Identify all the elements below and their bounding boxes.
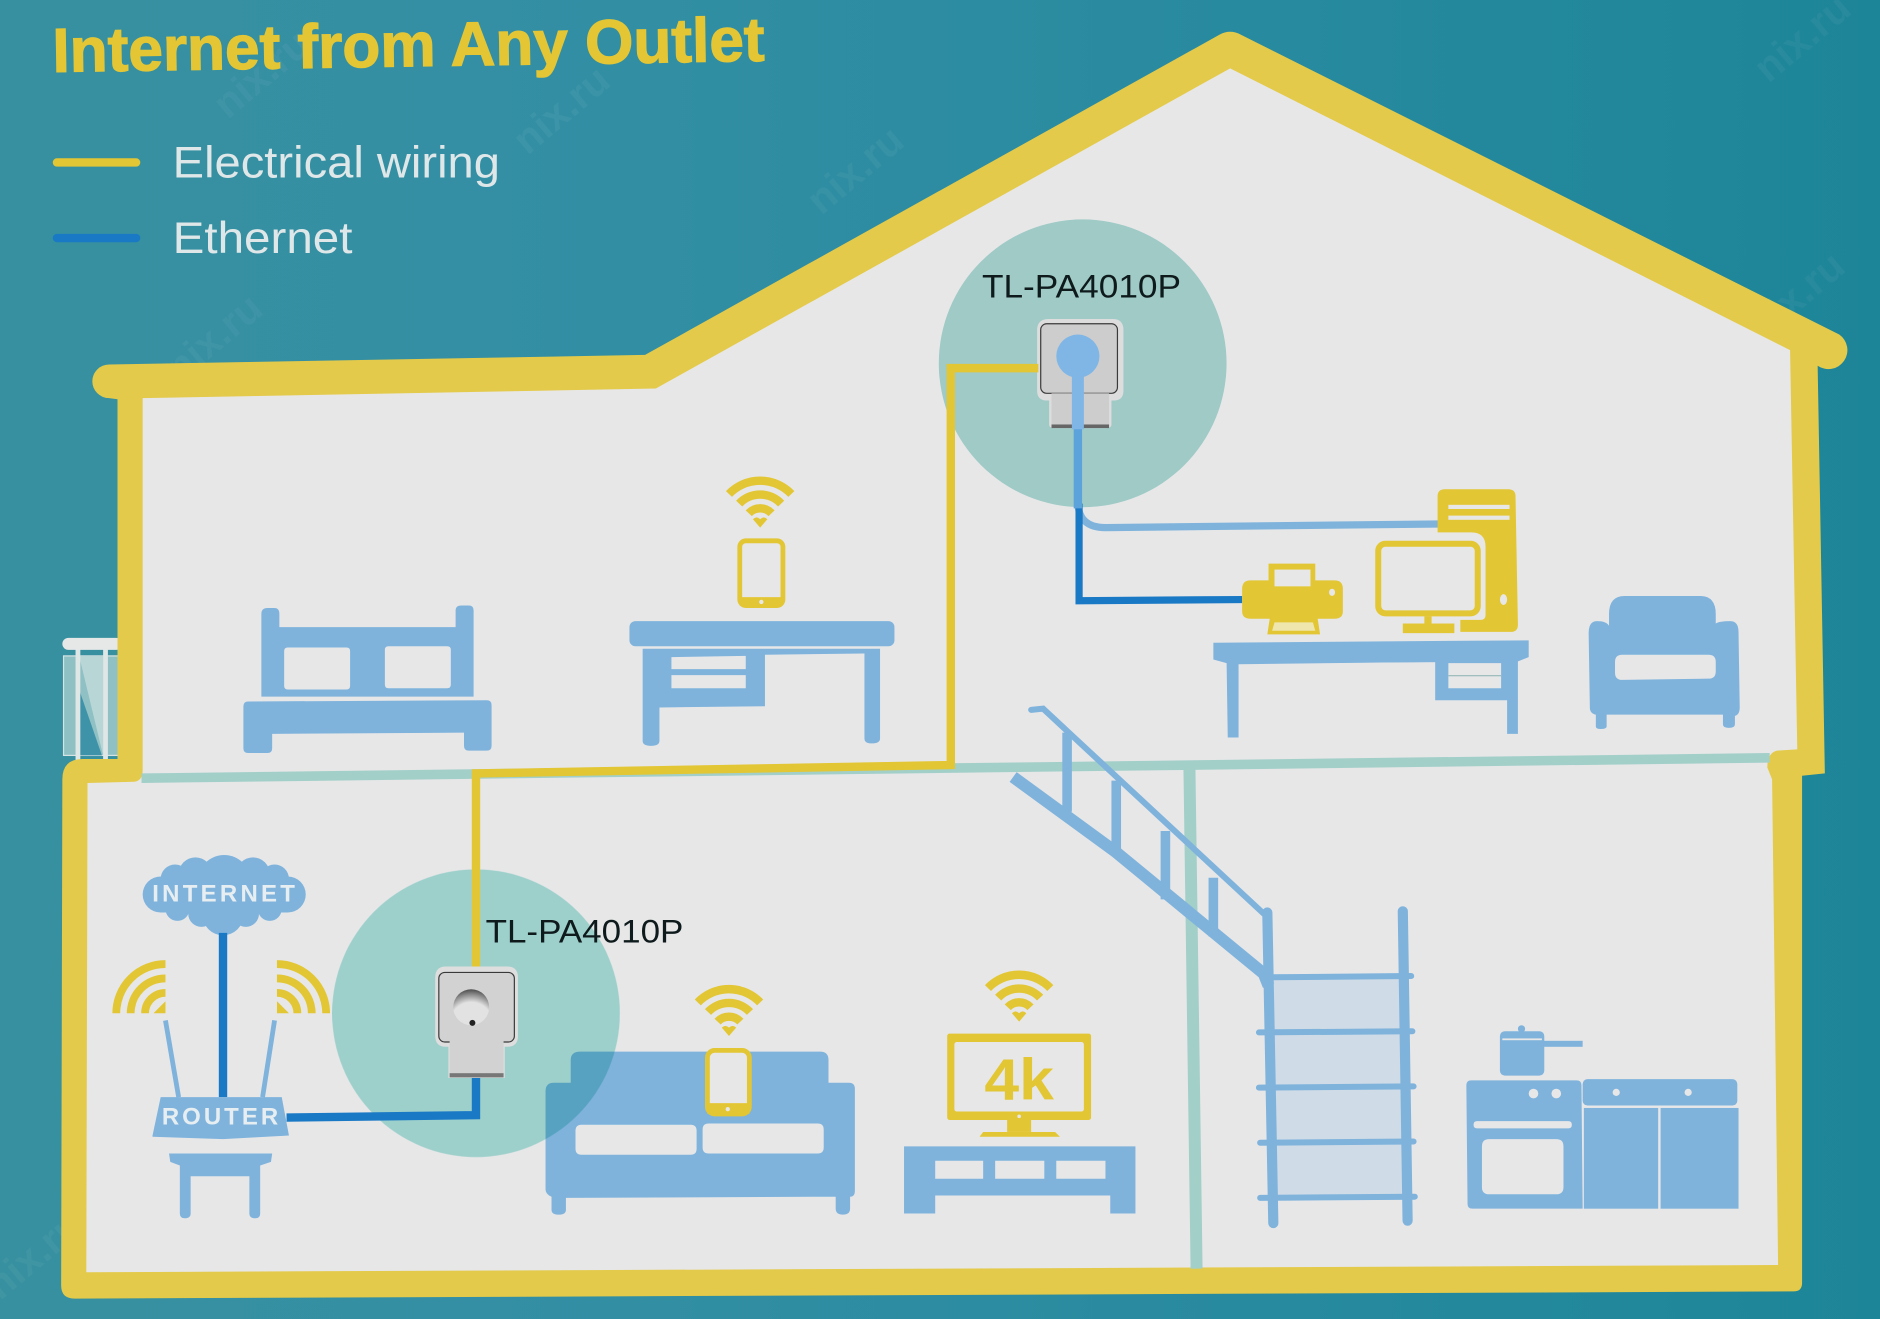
icon: tablet	[740, 541, 783, 606]
icon: phone	[707, 1050, 749, 1114]
wifi right	[277, 964, 326, 1013]
watermarks: nix.ru	[156, 284, 271, 391]
panel: lower adapter circle	[332, 869, 620, 1157]
legend: electrical wiring: Electrical wiring	[173, 138, 500, 187]
icon: computer tower	[1438, 489, 1518, 632]
wifi icon: sofa	[698, 989, 760, 1036]
furniture: sofa	[546, 1052, 855, 1215]
balcony railing	[62, 638, 122, 761]
watermarks: nix.ru	[1739, 242, 1853, 349]
wifi icon: tv	[988, 975, 1050, 1022]
furniture: stairs	[1013, 709, 1415, 1223]
furniture: tv stand	[904, 1146, 1135, 1213]
wifi icon: bedroom	[729, 481, 791, 528]
icon: monitor	[1378, 544, 1478, 633]
furniture: armchair	[1589, 596, 1740, 729]
watermarks: nix.ru	[504, 56, 618, 163]
floor line	[141, 758, 1770, 778]
furniture: bed	[261, 606, 474, 697]
panel: upper adapter circle	[939, 219, 1227, 507]
ethernet: internet to router	[220, 933, 227, 1097]
label: lower adapter: TL-PA4010P	[486, 913, 683, 949]
icon: printer	[1242, 564, 1343, 634]
legend: ethernet: Ethernet	[173, 214, 352, 263]
antennas	[165, 1020, 275, 1097]
lower powerline adapter	[435, 966, 518, 1078]
legend: electrical wiring	[53, 138, 500, 187]
furniture: pot	[1500, 1025, 1583, 1076]
electrical wiring	[476, 368, 1038, 966]
watermarks: nix.ru	[204, 20, 319, 127]
wifi left	[116, 964, 165, 1013]
label: upper adapter: TL-PA4010P	[982, 268, 1181, 304]
icon: 4k tv: 4k	[984, 1048, 1054, 1113]
furniture: oven	[1466, 1080, 1583, 1209]
furniture: office desk	[1213, 640, 1529, 737]
watermarks: nix.ru	[798, 116, 912, 223]
ethernet to printer	[1079, 504, 1242, 601]
icon: 4k tv	[947, 1034, 1091, 1137]
ethernet to computer	[1078, 426, 1439, 528]
furniture: router table	[169, 1154, 272, 1218]
furniture: desk upper left	[629, 621, 894, 746]
icon: internet cloud: INTERNET	[152, 881, 295, 908]
router: ROUTER	[162, 1104, 278, 1131]
oven knobs	[1529, 1089, 1561, 1098]
router	[152, 1097, 289, 1139]
upper powerline adapter	[1037, 319, 1123, 429]
legend: ethernet	[53, 214, 353, 263]
furniture: counter	[1583, 1079, 1739, 1209]
icon: internet cloud	[143, 855, 306, 935]
ethernet: router to adapter	[287, 1074, 476, 1118]
title: Internet from Any Outlet	[52, 6, 765, 86]
legend	[53, 138, 500, 263]
interior wall	[1189, 765, 1197, 1269]
